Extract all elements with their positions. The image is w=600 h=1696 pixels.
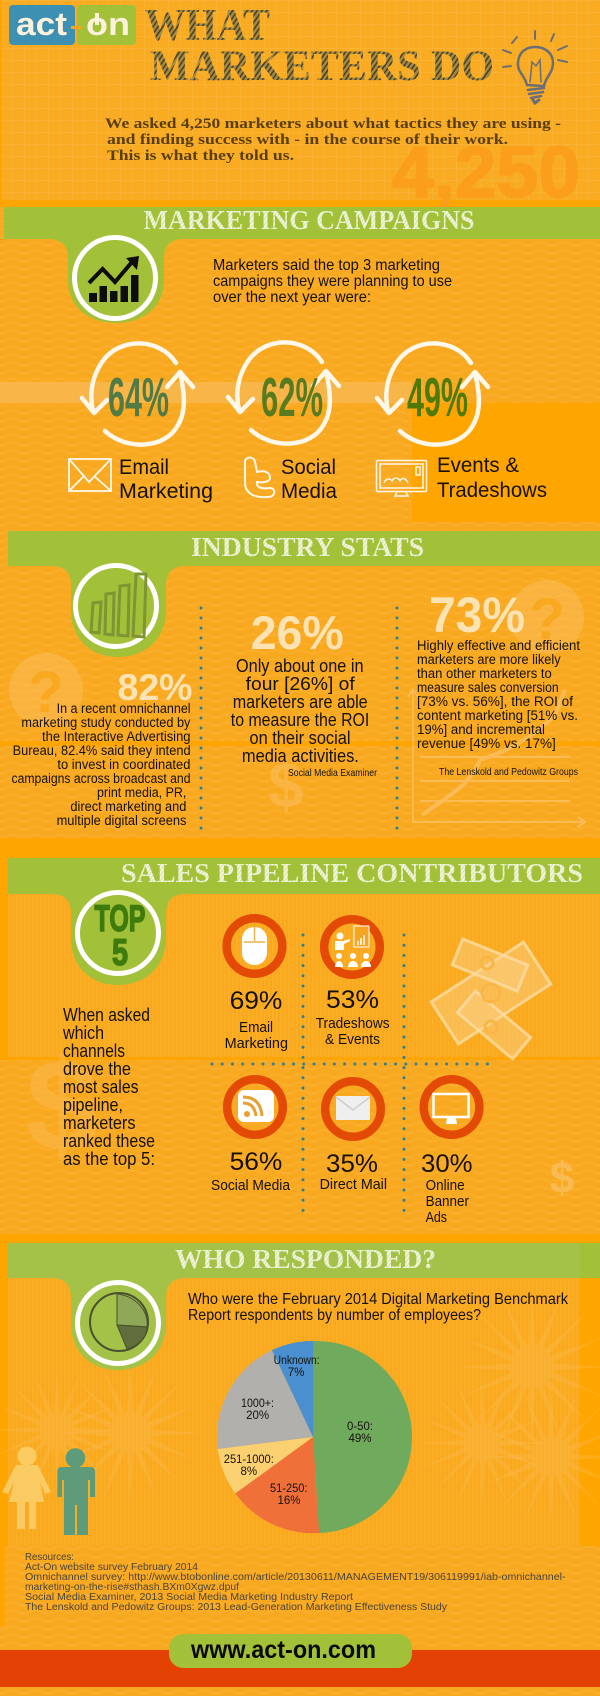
stat: 82% — [12, 667, 192, 828]
label — [119, 456, 213, 503]
stat: 82%: Bureau, 82.4% said they intend — [13, 743, 191, 758]
watermark: small dollar sign: $ — [550, 1154, 574, 1203]
percentage: 49% — [407, 366, 468, 428]
footer: www.act-on.com — [190, 1636, 376, 1664]
dotted divider — [200, 608, 202, 833]
label: Email — [119, 456, 169, 479]
stat: email marketing 69%: 69% — [230, 987, 282, 1015]
stat: 26%: on their social — [250, 728, 350, 748]
stat: 73% — [417, 587, 580, 778]
highlight block — [412, 403, 600, 522]
cycle arrows — [377, 343, 488, 445]
stat: direct mail 35% — [320, 1081, 387, 1193]
section banner — [8, 858, 600, 985]
label: Social — [281, 456, 336, 479]
stat: 73%: 73% — [429, 587, 525, 643]
icon: sketched pie — [78, 1282, 158, 1364]
resources text: marketing-on-the-rise#sthash.BXm0Xgwz.dpuf — [25, 1582, 239, 1593]
intro text: over the next year were: — [213, 289, 371, 306]
pie chart: 49% — [348, 1433, 372, 1445]
intro text: We asked 4,250 marketers about what tactics they are using - — [105, 116, 561, 132]
stat: 82%: marketing study conducted by — [21, 715, 191, 730]
stat: email marketing 69% — [225, 918, 288, 1052]
watermark: question mark right — [510, 580, 584, 654]
icon: mouse — [227, 918, 282, 974]
icon: envelope — [325, 1081, 381, 1137]
badge: top 5: 5 — [112, 932, 128, 973]
intro text: pipeline, — [63, 1095, 123, 1115]
stat: 82%: campaigns across broadcast and — [12, 771, 190, 786]
title: WHAT — [145, 0, 270, 50]
stat: tradeshows and events 53%: & Events — [325, 1031, 380, 1048]
watermark: starbursts — [0, 1290, 600, 1527]
stat: online banner ads 30%: Online — [426, 1177, 465, 1194]
resources text: Omnichannel survey: http://www.btobonline.com/article/20130611/MANAGEMENT19/306119991/iab-omnichannel- — [25, 1572, 566, 1583]
intro text: marketers — [63, 1113, 136, 1133]
stat: events and tradeshows 49% — [376, 343, 547, 502]
pie chart: 1000+: — [241, 1398, 274, 1410]
watermark: question mark left: ? — [28, 660, 64, 725]
icon: rss — [227, 1079, 283, 1135]
watermark: dollar sign: $ — [268, 749, 304, 821]
stat: 82%: to invest in coordinated — [57, 757, 190, 772]
question text: Report respondents by number of employees? — [188, 1307, 481, 1324]
watermark: question mark left — [9, 653, 83, 727]
stat: 26%: marketers are able — [233, 692, 368, 712]
intro text: When asked — [63, 1005, 150, 1025]
intro text: which — [62, 1023, 104, 1043]
stat: 26%: 26% — [251, 606, 344, 659]
section banner: SALES PIPELINE CONTRIBUTORS — [121, 858, 583, 888]
stat: 73%: measure sales conversion — [417, 680, 559, 695]
label: Tradeshows — [437, 479, 547, 502]
intro text: Marketers said the top 3 marketing — [213, 257, 440, 274]
label: Events & — [437, 454, 519, 477]
resources text: Act-On website survey February 2014 — [25, 1562, 198, 1573]
icon: light bulb — [503, 31, 567, 103]
icon: envelope — [69, 459, 111, 491]
intro text: campaigns they were planning to use — [213, 273, 452, 290]
stat: 73%: content marketing [51% vs. — [417, 708, 578, 723]
stat: 26%: Only about one in — [236, 656, 364, 676]
decorative strip — [0, 382, 412, 403]
stat: email marketing 69%: Email — [239, 1019, 273, 1036]
stat: social media 62% — [228, 342, 339, 503]
logo: act-on — [9, 5, 136, 45]
section banner — [8, 1243, 600, 1370]
pie chart: 0-50: — [347, 1421, 373, 1433]
resources text: Social Media Examiner, 2013 Social Media Marketing Industry Report — [25, 1592, 353, 1603]
pie chart: 51-250: — [270, 1483, 308, 1495]
stat: 73%: Highly effective and efficient — [417, 638, 580, 653]
section banner — [8, 531, 600, 657]
watermark: line chart — [408, 689, 585, 827]
stat: 26%: four [26%] of — [246, 674, 356, 694]
panel: marketing campaigns — [0, 205, 600, 522]
pie chart: 16% — [277, 1495, 301, 1507]
panel: who responded — [0, 1243, 600, 1613]
intro text: as the top 5: — [63, 1149, 155, 1169]
intro text — [105, 116, 561, 164]
label — [281, 456, 337, 503]
percentage: 62% — [261, 366, 323, 428]
icon: growth chart — [74, 238, 156, 318]
question text — [188, 1291, 569, 1324]
title: MARKETERS DO — [150, 43, 494, 90]
stat: 82%: the Interactive Advertising — [42, 729, 190, 744]
stat: email marketing 69%: Marketing — [225, 1035, 288, 1052]
stat: 73%: than other marketers to — [417, 666, 552, 681]
percentage: 64% — [108, 366, 169, 428]
stat: online banner ads 30%: 30% — [421, 1150, 473, 1178]
pie chart: Unknown: — [274, 1355, 320, 1367]
watermark number 4,250: 4,250 — [392, 133, 580, 213]
dotted divider — [396, 608, 398, 833]
pie chart: 8% — [240, 1466, 257, 1478]
title — [145, 0, 494, 90]
panel: header — [9, 0, 580, 213]
intro text: ranked these — [63, 1131, 155, 1151]
footer — [0, 1634, 600, 1687]
resources text: Resources: — [25, 1552, 74, 1563]
dotted grid dividers — [212, 935, 490, 1212]
stat: social media 56%: Social Media — [211, 1177, 291, 1194]
badge: top 5: TOP — [94, 898, 146, 939]
icon: monitor — [424, 1079, 479, 1135]
stat: online banner ads 30%: Ads — [426, 1209, 447, 1226]
stat: 26%: media activities. — [242, 746, 359, 766]
stat: tradeshows and events 53%: 53% — [326, 986, 379, 1014]
stat: 82%: 82% — [118, 667, 192, 708]
label: Marketing — [119, 480, 213, 503]
pie chart: 251-1000: — [224, 1454, 274, 1466]
stat: 73%: revenue [49% vs. 17%] — [417, 736, 556, 751]
label: Media — [281, 480, 337, 503]
intro text: This is what they told us. — [107, 148, 294, 164]
stat: direct mail 35%: Direct Mail — [320, 1176, 387, 1193]
intro text: drove the — [63, 1059, 131, 1079]
icon: sketched bars — [76, 566, 156, 646]
stat: 26% — [231, 606, 377, 779]
watermark: large dollar sign: $ — [26, 1032, 98, 1178]
watermark: dollar bills — [431, 939, 551, 1059]
stat: 73%: marketers are more likely — [417, 652, 561, 667]
stat: social media 56% — [211, 1079, 291, 1194]
cycle arrows — [82, 343, 193, 445]
panel: industry stats — [8, 531, 600, 833]
section banner: WHO RESPONDED? — [175, 1244, 436, 1274]
icon: woman — [2, 1446, 51, 1529]
label — [437, 454, 547, 502]
stat: tradeshows and events 53%: Tradeshows — [316, 1015, 390, 1032]
icon: presentation monitor — [376, 460, 426, 496]
intro text: most sales — [63, 1077, 138, 1097]
section banner: INDUSTRY STATS — [191, 532, 424, 562]
stat: online banner ads 30% — [421, 1079, 479, 1226]
stat: 73%: [73% vs. 56%], the ROI of — [417, 694, 573, 709]
section banner — [4, 205, 600, 323]
stat: 73%: 19%] and incremental — [417, 722, 545, 737]
stat: tradeshows and events 53% — [316, 919, 390, 1048]
stat: direct mail 35%: 35% — [326, 1150, 378, 1178]
panel: sales pipeline contributors — [8, 858, 600, 1226]
resources text — [25, 1552, 566, 1613]
stat: 82%: direct marketing and — [70, 799, 186, 814]
stat: 26%: to measure the ROI — [231, 710, 369, 730]
stat: 82%: print media, PR, — [97, 785, 186, 800]
icon: man — [57, 1448, 95, 1535]
icon: twitter bird letter — [245, 458, 274, 497]
intro text — [213, 257, 452, 306]
stat: 26%: Social Media Examiner — [288, 767, 377, 779]
question text: Who were the February 2014 Digital Marketing Benchmark — [188, 1291, 569, 1308]
logo: act-on: on — [86, 6, 130, 42]
intro text: and finding success with - in the course of their work. — [107, 132, 508, 148]
stat: email marketing 64% — [69, 343, 213, 503]
badge: top 5 — [78, 892, 158, 974]
logo: act-on: act — [16, 6, 67, 42]
watermark: question mark right: ? — [529, 587, 565, 652]
pie chart — [217, 1341, 412, 1533]
icon: presenter and audience — [324, 919, 380, 975]
pie chart: 7% — [288, 1367, 304, 1379]
cycle arrows — [228, 342, 339, 444]
stat: online banner ads 30%: Banner — [426, 1193, 469, 1210]
intro text: channels — [63, 1041, 125, 1061]
resources text: The Lenskold and Pedowitz Groups: 2013 Lead-Generation Marketing Effectiveness Study — [25, 1602, 447, 1613]
section banner: MARKETING CAMPAIGNS — [144, 205, 474, 235]
intro text — [62, 1005, 155, 1169]
stat: 82%: In a recent omnichannel — [57, 701, 191, 716]
pie chart: 20% — [246, 1410, 269, 1422]
stat: social media 56%: 56% — [230, 1148, 282, 1176]
stat: 82%: multiple digital screens — [57, 813, 187, 828]
